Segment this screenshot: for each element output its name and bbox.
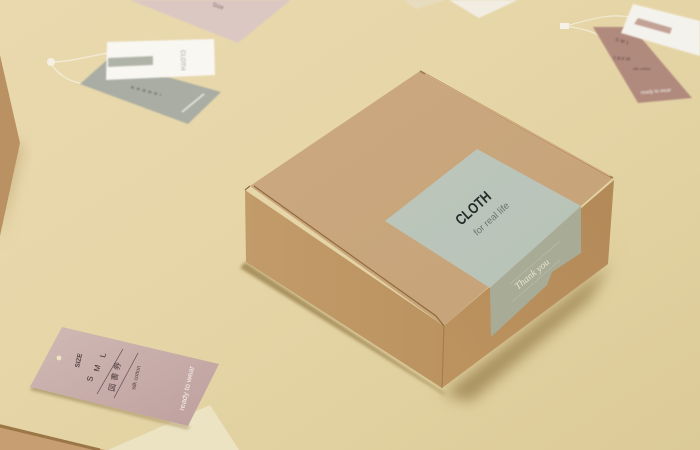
- size text: SIZE: [74, 352, 84, 368]
- brown tag: TRKM: [613, 56, 631, 63]
- front left face: [245, 190, 444, 388]
- white tag: CLOTH: [179, 50, 185, 70]
- top face: [250, 71, 613, 326]
- grey tag: [80, 60, 221, 124]
- string: [50, 53, 108, 84]
- pink size tag: L: [98, 352, 108, 358]
- kraft box: for real life: [472, 200, 512, 238]
- partial box at left edge: [0, 55, 24, 240]
- front right face: [442, 180, 614, 388]
- sticker label side: [490, 206, 581, 337]
- top pink card: [130, 0, 291, 43]
- hole: [57, 356, 61, 360]
- grey and white hang tags: [47, 39, 221, 124]
- cream triangle card: [108, 405, 239, 450]
- top centre cards: [404, 0, 518, 18]
- brown tag: silk cotton: [633, 66, 651, 71]
- pink size tag: silk cotton: [131, 365, 142, 390]
- brown tag: SML: [615, 37, 632, 47]
- logo text: CLOTH: [452, 188, 495, 229]
- pink size tag: 図書券: [106, 358, 123, 392]
- pink size tag: M: [92, 364, 103, 372]
- top pink card: Size: [211, 2, 225, 12]
- ready to wear text: ready to wear: [177, 365, 196, 411]
- white tag: [106, 39, 215, 80]
- white tag: [621, 4, 700, 56]
- bottom left kraft box corner: [0, 424, 105, 450]
- pink size tag: [30, 327, 219, 429]
- top right hang tags: [560, 4, 700, 103]
- brown tag: [593, 27, 692, 103]
- sticker label side: Thank you: [513, 257, 552, 292]
- lid flap ridges: [420, 71, 613, 178]
- brown tag: ready to wear: [641, 87, 672, 96]
- pink size tag: S: [85, 375, 95, 382]
- sticker label top: [385, 149, 581, 288]
- string: [565, 16, 634, 36]
- kraft box: [245, 71, 614, 388]
- box shadow: [443, 246, 620, 402]
